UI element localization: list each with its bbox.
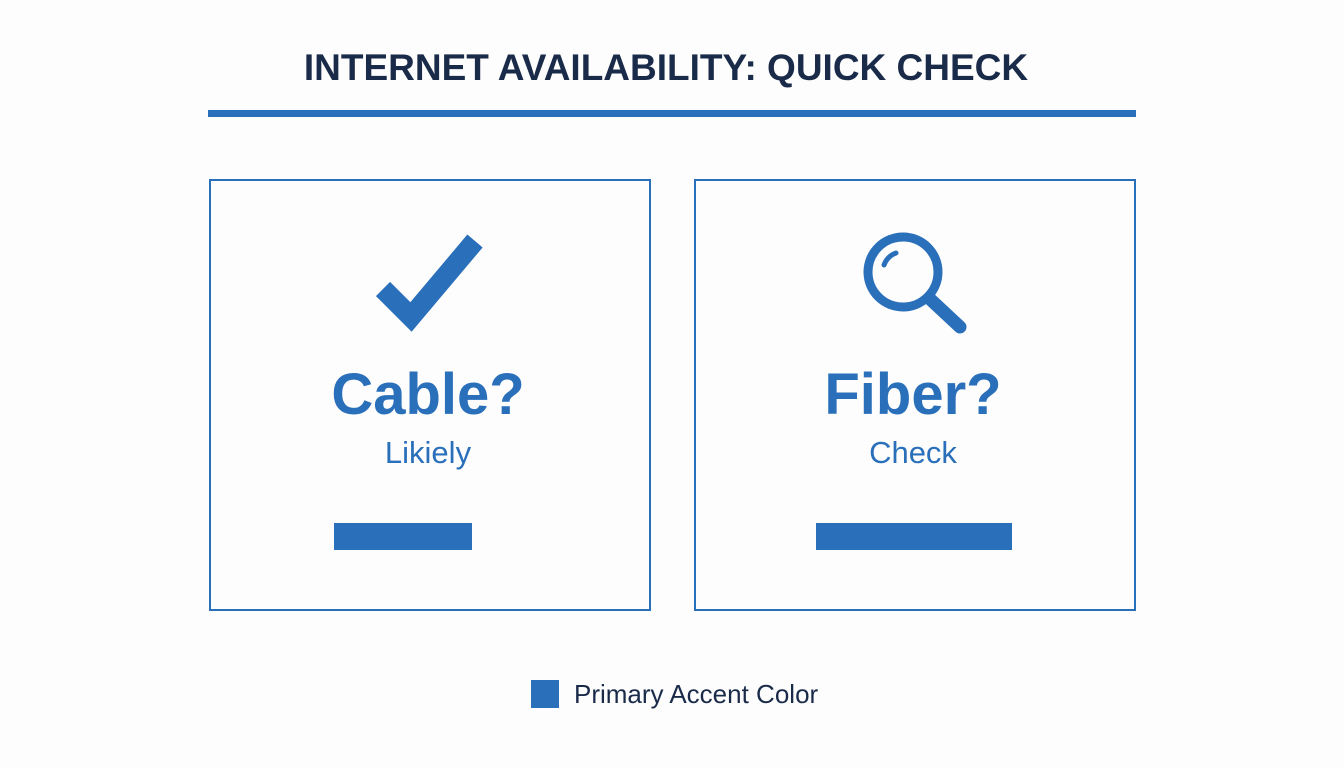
- icon: check mark: [376, 234, 483, 332]
- text: likely: Likiely: [385, 435, 471, 470]
- legend swatch: [531, 680, 559, 708]
- panel: fiber: [694, 179, 1136, 611]
- title underline: [208, 110, 1136, 117]
- heading: fiber: Fiber?: [824, 362, 1002, 427]
- panel: cable: [209, 179, 651, 611]
- title: INTERNET AVAILABILITY: QUICK CHECK: [304, 47, 1028, 88]
- text: check: Check: [869, 435, 957, 470]
- icon: magnifier: [864, 232, 966, 334]
- heading: cable: Cable?: [331, 362, 525, 427]
- bar: cable: [334, 523, 472, 550]
- bar: fiber: [816, 523, 1012, 550]
- legend label: Primary Accent Color: [574, 679, 818, 709]
- legend: [531, 679, 818, 709]
